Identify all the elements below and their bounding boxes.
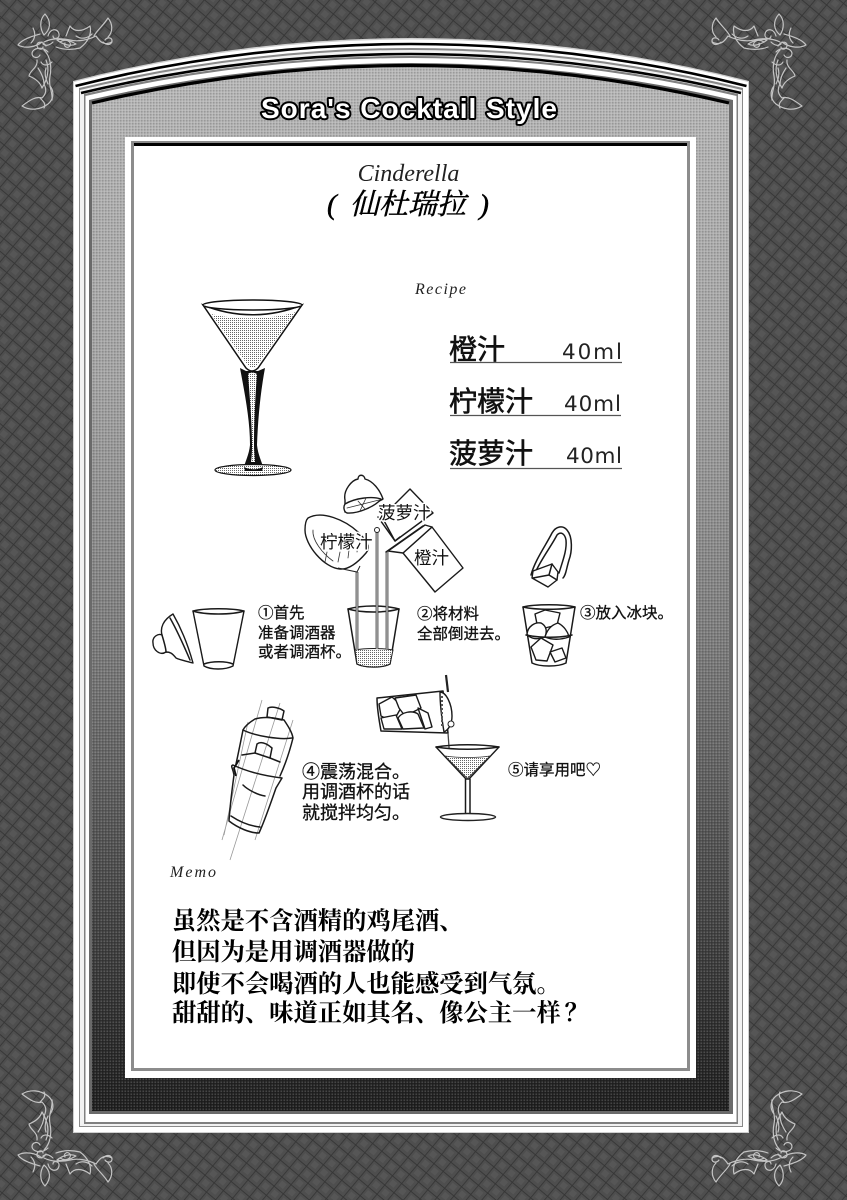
icon: shaking shaker: [222, 700, 293, 860]
icon: tongs with ice cube: [531, 527, 571, 587]
memo label: Memo: [169, 864, 216, 881]
label: pineapple juice: 菠萝汁: [378, 503, 430, 523]
ingredient: pineapple juice: [449, 438, 622, 469]
icon: glass of ice: [523, 605, 575, 666]
white card with inner rule: [125, 137, 696, 1078]
icon: tilted mixing glass with strainer: [377, 675, 454, 754]
step 1 text: 或者调酒杯。: [258, 643, 351, 661]
ingredient: pineapple juice: 菠萝汁: [449, 438, 533, 469]
step 1 text: ①首先: [258, 604, 305, 622]
chinese name: ( 仙杜瑞拉 ): [327, 189, 489, 221]
memo text: 甜甜的、味道正如其名、像公主一样？: [172, 1000, 589, 1027]
english name: Cinderella: [358, 161, 459, 187]
step 4 text: 用调酒杯的话: [302, 782, 410, 802]
step 1: shaker parts and text: [153, 604, 351, 669]
ingredient: orange juice: 40ml: [562, 340, 622, 365]
icon: orange juice carton: [386, 525, 463, 592]
ingredient: lemon juice: 40ml: [564, 392, 621, 417]
illustration: martini glass: [203, 300, 302, 476]
label: orange juice: 橙汁: [414, 548, 449, 568]
corner ornament bottom right: [712, 1091, 806, 1186]
ingredient: orange juice: 橙汁: [449, 334, 505, 365]
memo text: 虽然是不含酒精的鸡尾酒、: [172, 908, 464, 935]
icon: mixing glass with streams: [348, 531, 399, 667]
ingredient: lemon juice: [449, 386, 621, 417]
arched striped frame: [73, 38, 749, 1133]
icon: squeezed lemon: [305, 475, 383, 572]
ingredient: lemon juice: 柠檬汁: [449, 386, 533, 417]
step 4: shake: [222, 700, 410, 860]
gradient halftone panel: [92, 66, 729, 1111]
memo text: 但因为是用调酒器做的: [172, 939, 415, 966]
ingredient: orange juice: [449, 334, 622, 365]
step 3: add ice: [523, 527, 673, 666]
memo text: 即使不会喝酒的人也能感受到气氛。: [172, 970, 561, 998]
step 4 text: 就搅拌均匀。: [302, 803, 410, 823]
corner ornament top left: [18, 14, 112, 109]
icon: small martini glass: [436, 745, 499, 820]
label: lemon juice: 柠檬汁: [320, 532, 372, 552]
corner ornament bottom left: [18, 1091, 112, 1186]
cocktail name: [327, 161, 489, 221]
recipe list: [449, 334, 622, 469]
step 2 text: 全部倒进去。: [417, 625, 510, 643]
icon: shaker cup and lid: [153, 609, 244, 669]
step 3 text: ③放入冰块。: [580, 604, 673, 622]
step 2: pouring juices: [305, 475, 510, 667]
step 4 text: ④震荡混合。: [302, 762, 410, 782]
corner ornament top right: [712, 14, 806, 109]
ingredient: pineapple juice: 40ml: [566, 444, 622, 469]
title: Sora's Cocktail Style: [261, 93, 557, 124]
step 2 text: ②将材料: [417, 605, 479, 623]
recipe label: Recipe: [414, 281, 466, 298]
step 1 text: 准备调酒器: [258, 624, 336, 642]
icon: pineapple juice carton: [374, 489, 433, 541]
step 5: strain and enjoy: [377, 675, 601, 820]
step 5 text: ⑤请享用吧♡: [508, 761, 601, 779]
